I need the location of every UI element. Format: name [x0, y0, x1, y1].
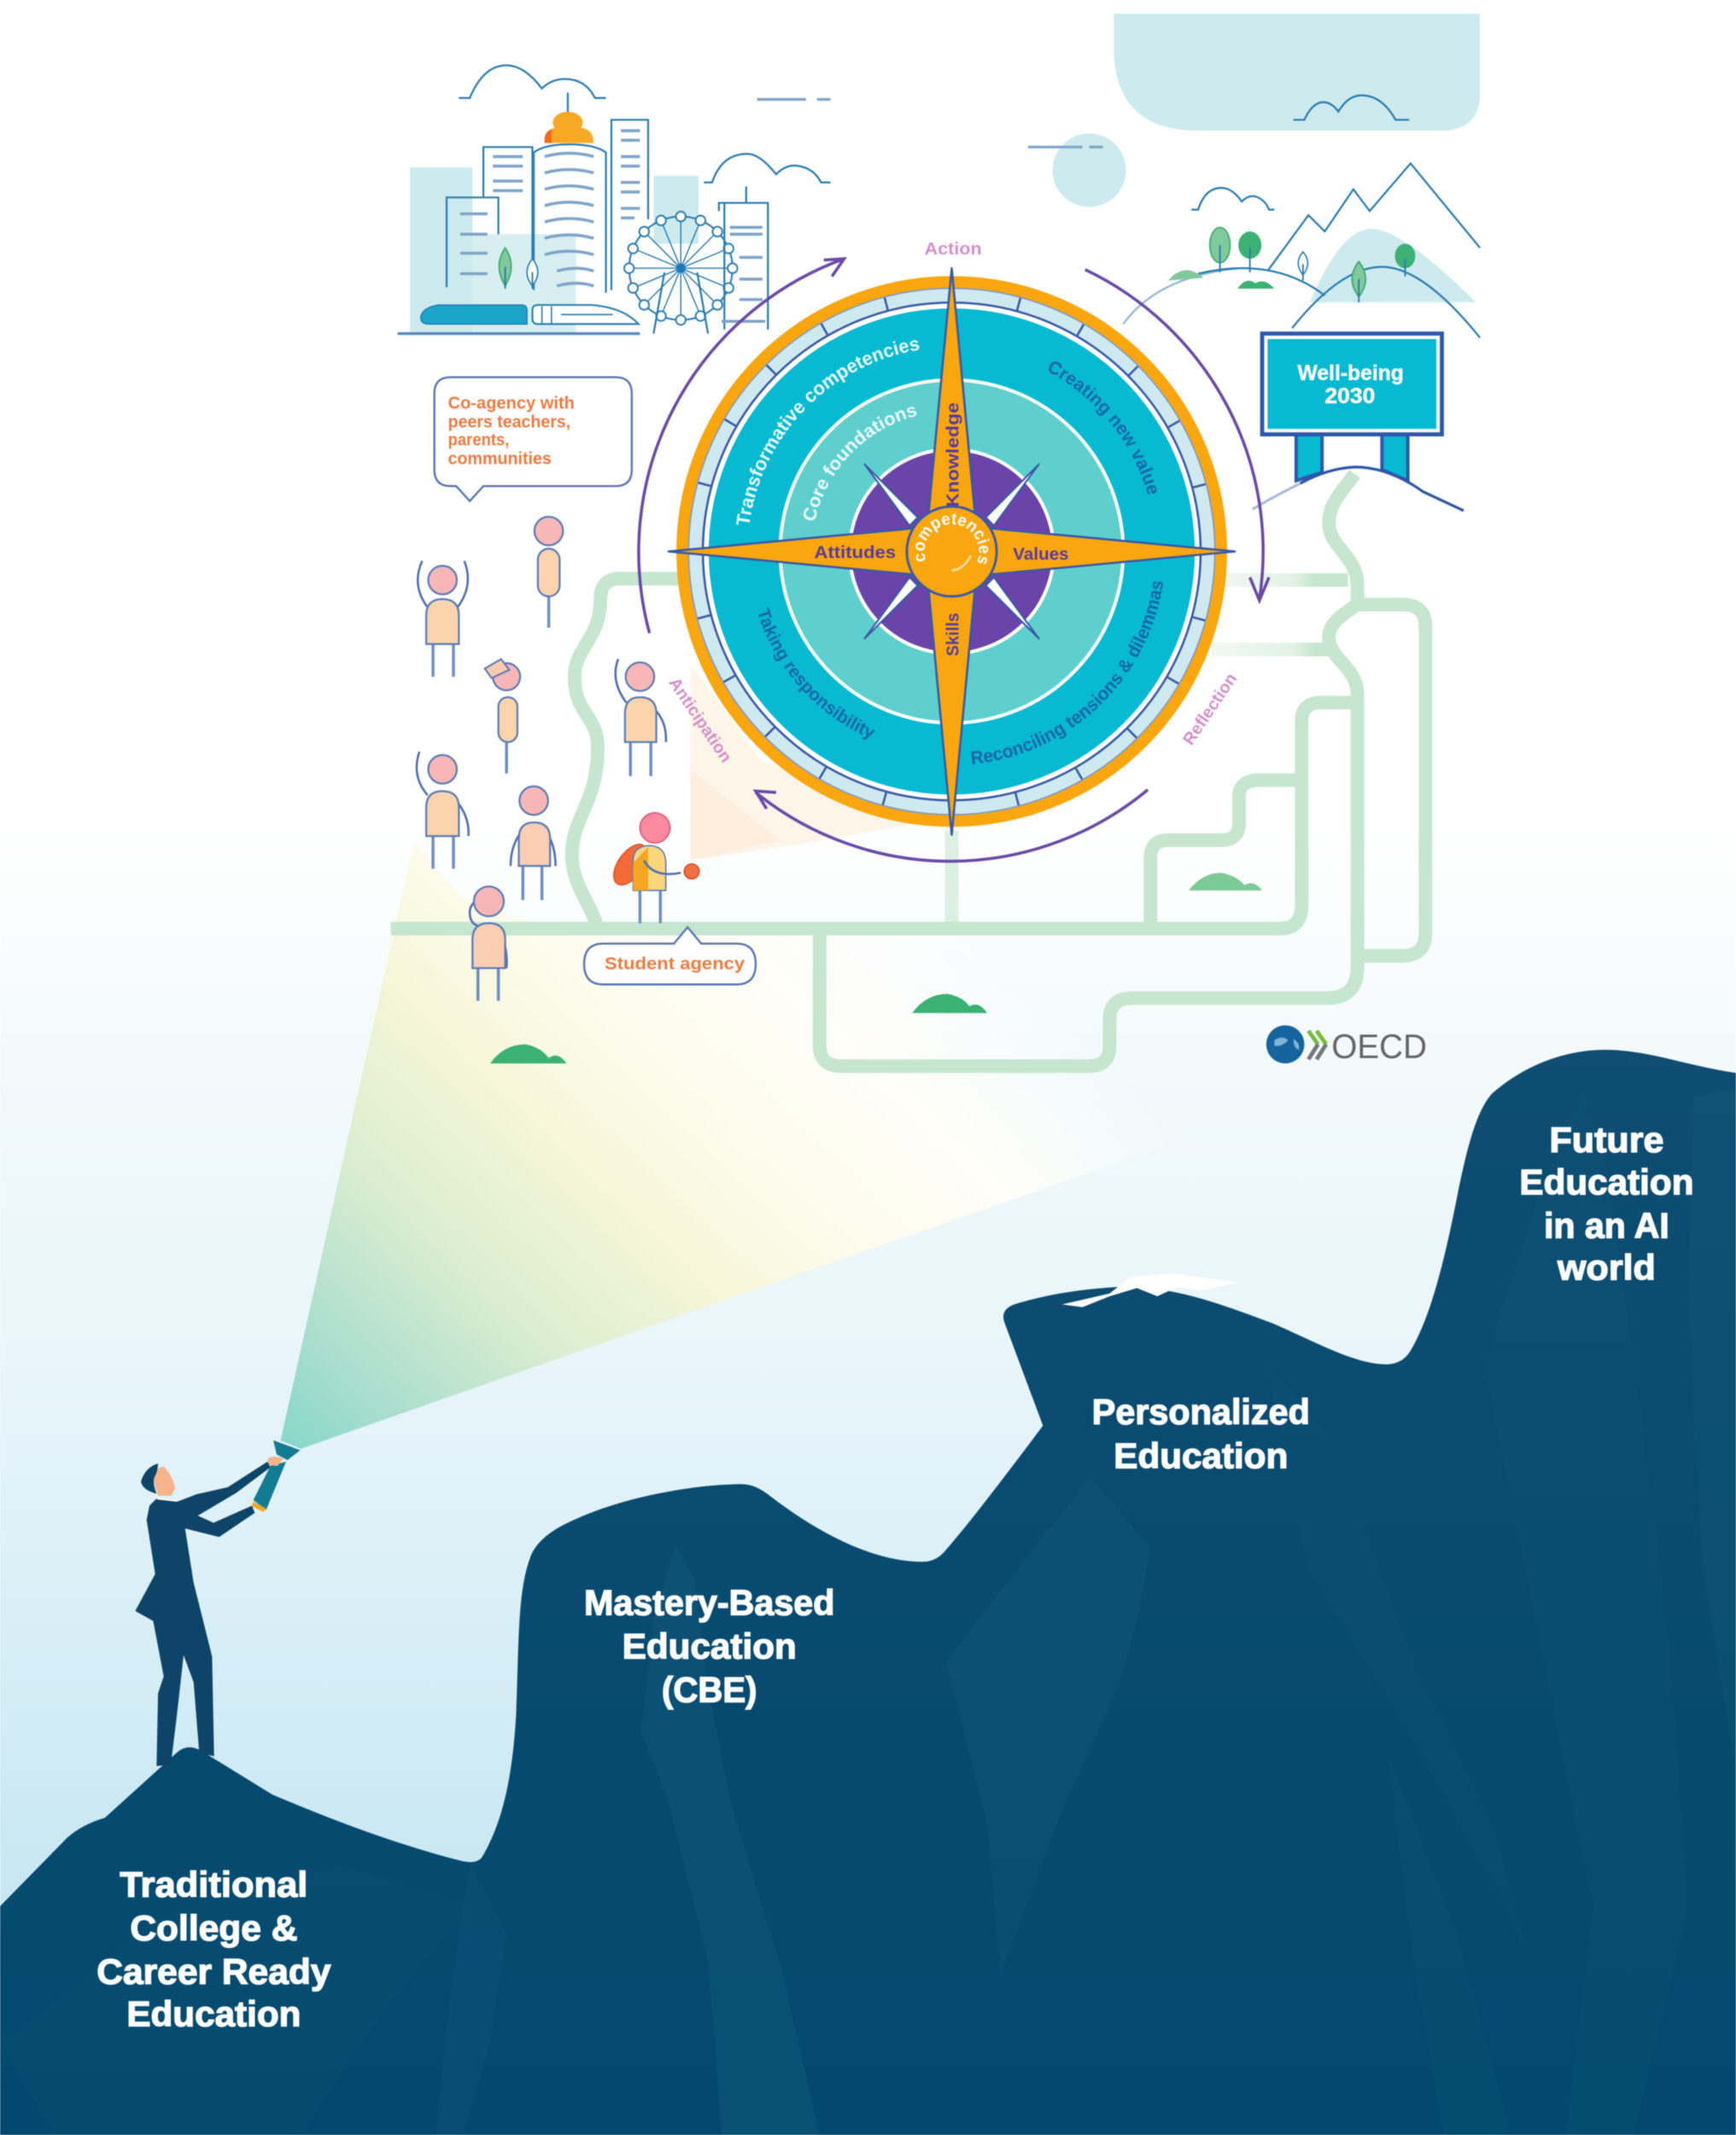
stage label: personalized [1092, 1392, 1310, 1476]
snow cap [1062, 1273, 1239, 1307]
stage label: traditional: Career Ready [96, 1951, 331, 1992]
icon: trees [1168, 227, 1415, 302]
person 7 [470, 886, 506, 1001]
bubble text: co-agency: communities [448, 450, 552, 469]
collar [156, 1498, 178, 1501]
arrow: anticipation to action [639, 259, 845, 633]
sun circle [1053, 133, 1126, 207]
cycle arrows [639, 259, 1269, 861]
stage label: traditional: Traditional [120, 1864, 307, 1904]
arrow: reflection to anticipation [756, 790, 1148, 861]
compass diagonal points [865, 465, 1039, 639]
stage label: traditional [96, 1864, 331, 2033]
ring labels: Taking responsibility [758, 606, 876, 740]
OECD logo: OECD [1331, 1028, 1427, 1066]
sky cloud panel [1113, 14, 1480, 131]
person 3: cap [485, 659, 520, 774]
cloud outline in panel [1294, 96, 1409, 120]
bubble text: co-agency: parents, [448, 430, 509, 449]
flashlight [252, 1440, 301, 1512]
ring labels: Reconciling tensions & dilemmas [970, 581, 1163, 765]
person 4 [616, 659, 666, 776]
stage label: mastery-based: Education [623, 1626, 797, 1666]
mountain facets [0, 1090, 1736, 2135]
man with flashlight [135, 1440, 301, 1766]
stage label: personalized: Education [1113, 1436, 1288, 1476]
train [421, 305, 639, 324]
ring labels: competencies [915, 512, 991, 565]
mountain range [0, 1050, 1736, 2135]
compass point labels: Knowledge [944, 402, 963, 507]
cycle labels [665, 240, 1241, 766]
compass centre [907, 506, 997, 596]
stage label: mastery-based: (CBE) [662, 1670, 757, 1710]
stage label: mastery-based: Mastery-Based [584, 1582, 834, 1623]
stage label: traditional: College & [130, 1908, 297, 1948]
hills and mountains illustration [1123, 163, 1480, 337]
stage label: future [1519, 1120, 1693, 1288]
green pathways [391, 474, 1425, 1066]
stage label: future: Future [1549, 1120, 1663, 1160]
stage label: future: in an AI [1544, 1205, 1669, 1245]
right tower [719, 186, 768, 330]
ring labels: Transformative competencies [735, 340, 921, 526]
stage label: personalized: Personalized [1092, 1392, 1310, 1432]
suit [135, 1461, 271, 1766]
compass point labels: Skills [944, 612, 963, 656]
icon: park trees [499, 248, 538, 289]
stage label: mastery-based [584, 1582, 834, 1710]
bubble text: student agency: Student agency [605, 954, 745, 974]
people: group of peers [417, 517, 666, 1001]
speech bubble: co-agency [435, 377, 632, 501]
bubble text: co-agency: Co-agency with [448, 394, 575, 412]
city illustration [398, 66, 831, 334]
stage label: traditional: Education [126, 1993, 301, 2033]
icon: green bushes [490, 873, 1262, 1063]
flashlight beam [281, 841, 1484, 1448]
ring labels: Creating new value [1049, 360, 1157, 495]
compass point labels: Values [1013, 544, 1069, 564]
person 1: arms raised [418, 561, 468, 676]
icon: orange dome [545, 112, 593, 143]
billboard text: Well-being [1298, 362, 1404, 385]
stage label: future: Education [1519, 1161, 1693, 1202]
bubble text: co-agency [448, 394, 575, 469]
student figure [607, 813, 699, 923]
icon: ferris wheel [624, 212, 738, 334]
billboard: well-being 2030 [1262, 334, 1442, 481]
sky dashes [757, 99, 1103, 147]
compass wheel [667, 266, 1236, 837]
person 5 [417, 752, 469, 869]
compass point labels: Attitudes [815, 543, 896, 563]
swoosh in centre [952, 556, 971, 570]
OECD logo [1266, 1026, 1427, 1066]
bubble text: co-agency: peers teachers, [448, 413, 570, 432]
face [152, 1466, 175, 1495]
ring labels [735, 340, 1163, 765]
peach light wedge near student [690, 664, 952, 861]
hill under billboard [1253, 467, 1464, 511]
cycle labels: Reflection [1179, 670, 1241, 749]
stage label: future: world [1557, 1248, 1656, 1288]
arrow: action to reflection [1085, 270, 1269, 600]
speech bubble: student agency [584, 927, 756, 985]
person 6 [511, 787, 556, 900]
hair [141, 1464, 158, 1494]
billboard text: 2030 [1324, 385, 1375, 408]
compass cardinal points [669, 268, 1235, 834]
billboard text [1298, 362, 1404, 408]
ring labels: Core foundations [803, 407, 917, 521]
compass point labels [815, 402, 1069, 656]
person 2 [535, 517, 563, 628]
cycle labels: Action [925, 240, 982, 259]
cycle labels: Anticipation [665, 674, 735, 766]
